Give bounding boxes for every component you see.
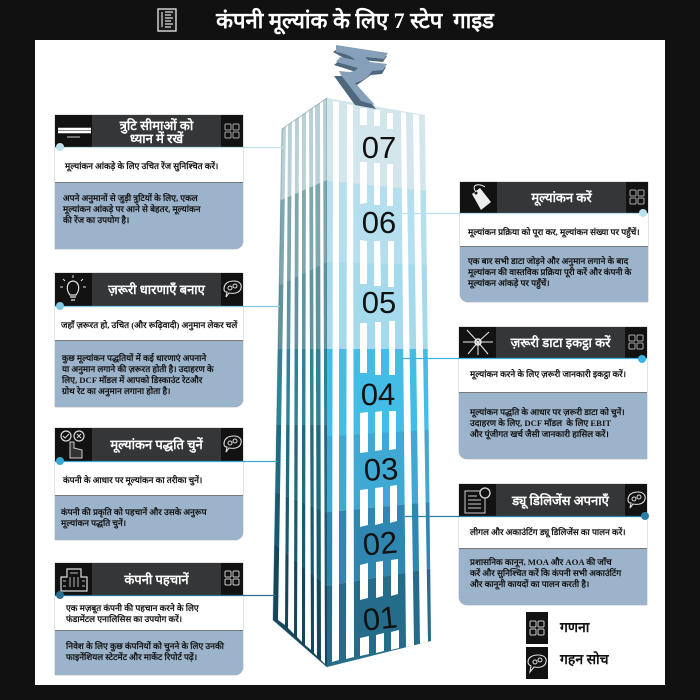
panel: assumptions (left 2): ग्रोथ रेट का अनुमान लगाना होता है।: [62, 386, 170, 396]
panel: collect data (right 2): [459, 327, 647, 459]
chart: valuation tower: [243, 45, 460, 668]
rupee symbol: [333, 45, 388, 109]
panel: do valuation (right 1): मूल्यांकन आंकड़े पर पहुँचें।: [468, 278, 550, 288]
panel: choose method (left 3): मूल्यांकन पद्धति चुनें।: [61, 518, 126, 528]
panel: collect data (right 2): मूल्यांकन पद्धति के आधार पर ज़रूरी डाटा को चुनें।: [470, 407, 625, 417]
front face of tower: [327, 98, 431, 667]
panel: assumptions (left 2): [55, 273, 243, 407]
step numbers: 01: [361, 599, 399, 638]
icon: checklist document: [157, 8, 177, 32]
panel: do valuation (right 1): मूल्यांकन करें: [531, 190, 592, 205]
step numbers: [360, 130, 399, 638]
panel: identify company (left 4): निवेश के लिए कुछ कंपनियों को चुनने के लिए उनकी: [66, 641, 224, 651]
step numbers: 05: [362, 285, 396, 320]
legend: calculation label: गणना: [560, 621, 589, 636]
panel: assumptions (left 2): लिए, DCF मॉडल में आपको डिस्काउंट रेटऔर: [62, 375, 202, 385]
panel: choose method (left 3): कंपनी की प्रकृति को पहचानें और उसके अनुरूप: [61, 507, 207, 517]
panel: due diligence (right 3): लीगल और अकाउंटिंग ड्यू डिलिजेंस का पालन करें।: [470, 527, 626, 537]
panel: assumptions (left 2): या अनुमान लगाने की ज़रूरत होती है। उदाहरण के: [62, 364, 214, 374]
panel: error ranges (left 1): [55, 115, 243, 249]
panel: do valuation (right 1): मूल्यांकन की वास्तविक प्रक्रिया पूरी करें और कंपनी के: [468, 267, 631, 277]
panel: due diligence (right 3): करें और सुनिश्चित करें कि कंपनी सभी अकाउंटिंग: [470, 568, 621, 578]
step numbers: 02: [361, 525, 399, 562]
panel: identify company (left 4): फाइनेंशियल स्टेटमेंट और मार्केट रिपोर्ट पढ़ें।: [66, 652, 197, 662]
legend: deep thinking label: गहन सोच: [560, 653, 609, 668]
panel: identify company (left 4): एक मज़बूत कंपनी की पहचान करने के लिए: [66, 603, 199, 613]
panel: error ranges (left 1): त्रुटि सीमाओं को: [120, 118, 193, 132]
step numbers: 07: [362, 130, 396, 165]
panel: identify company (left 4): फंडामेंटल एनालिसिस का उपयोग करें।: [66, 614, 182, 624]
step numbers: 04: [360, 377, 396, 412]
panel: assumptions (left 2): कुछ मूल्यांकन पद्धतियों में कई धारणाएं अपनाने: [62, 353, 206, 363]
panel: error ranges (left 1): की रेंज का उपयोग है।: [63, 215, 129, 225]
panel: choose method (left 3): [55, 428, 243, 540]
panel: error ranges (left 1): ध्यान में रखें: [130, 130, 183, 146]
panel: error ranges (left 1): मूल्यांकन आंकड़े पर आने से बेहतर, मूल्यांकन: [63, 204, 200, 214]
panel: collect data (right 2): मूल्यांकन करने के लिए ज़रूरी जानकारी इकट्ठा करें।: [470, 369, 626, 379]
panel: collect data (right 2): और पूंजीगत खर्च जैसी जानकारी हासिल करें।: [470, 429, 609, 439]
panel: error ranges (left 1): मूल्यांकन आंकड़े के लिए उचित रेंज सुनिश्चित करें।: [65, 161, 218, 171]
panel: identify company (left 4): [55, 563, 243, 675]
step numbers: 03: [363, 451, 399, 488]
panel: assumptions (left 2): ज़रूरी धारणाएँ बनाए: [108, 282, 205, 297]
left face of tower: [273, 98, 327, 667]
white window stripes: [332, 101, 428, 662]
legend: deep thinking icon: [526, 647, 548, 679]
panel: collect data (right 2): ज़रूरी डाटा इकट्ठा करें: [511, 335, 610, 350]
panel: do valuation (right 1): [460, 182, 648, 302]
title: कंपनी मूल्यांक के लिए 7 स्टेप गाइड: [216, 8, 494, 33]
panel: identify company (left 4): कंपनी पहचानें: [124, 572, 189, 586]
legend: calculation icon: [526, 612, 548, 644]
panel: due diligence (right 3): और कानूनी कायदों का पालन करती है।: [470, 579, 589, 589]
panel: do valuation (right 1): मूल्यांकन प्रक्रिया को पूरा कर, मूल्यांकन संख्या पर पहुँचें।: [468, 227, 640, 237]
panel: due diligence (right 3): प्रशासनिक कानून, MOA और AOA की जाँच: [470, 557, 612, 567]
panel: do valuation (right 1): एक बार सभी डाटा जोड़ने और अनुमान लगाने के बाद: [468, 256, 628, 266]
panel: due diligence (right 3): [459, 484, 647, 605]
panel: due diligence (right 3): ड्यू डिलिजेंस अपनाएँ: [512, 492, 609, 508]
panel: choose method (left 3): कंपनी के आधार पर मूल्यांकन का तरीका चुनें।: [63, 475, 202, 485]
panel: assumptions (left 2): जहाँ ज़रूरत हो, उचित (और रूढ़िवादी) अनुमान लेकर चलें: [61, 320, 237, 330]
panel: choose method (left 3): मूल्यांकन पद्धति चुनें: [110, 437, 203, 452]
panel: error ranges (left 1): अपने अनुमानों से जुड़ी त्रुटियों के लिए, एकल: [63, 193, 198, 203]
panel: collect data (right 2): उदाहरण के लिए, DCF मॉडल के लिए EBIT: [470, 418, 611, 428]
step numbers: 06: [362, 205, 396, 240]
connector lines: [243, 148, 460, 596]
